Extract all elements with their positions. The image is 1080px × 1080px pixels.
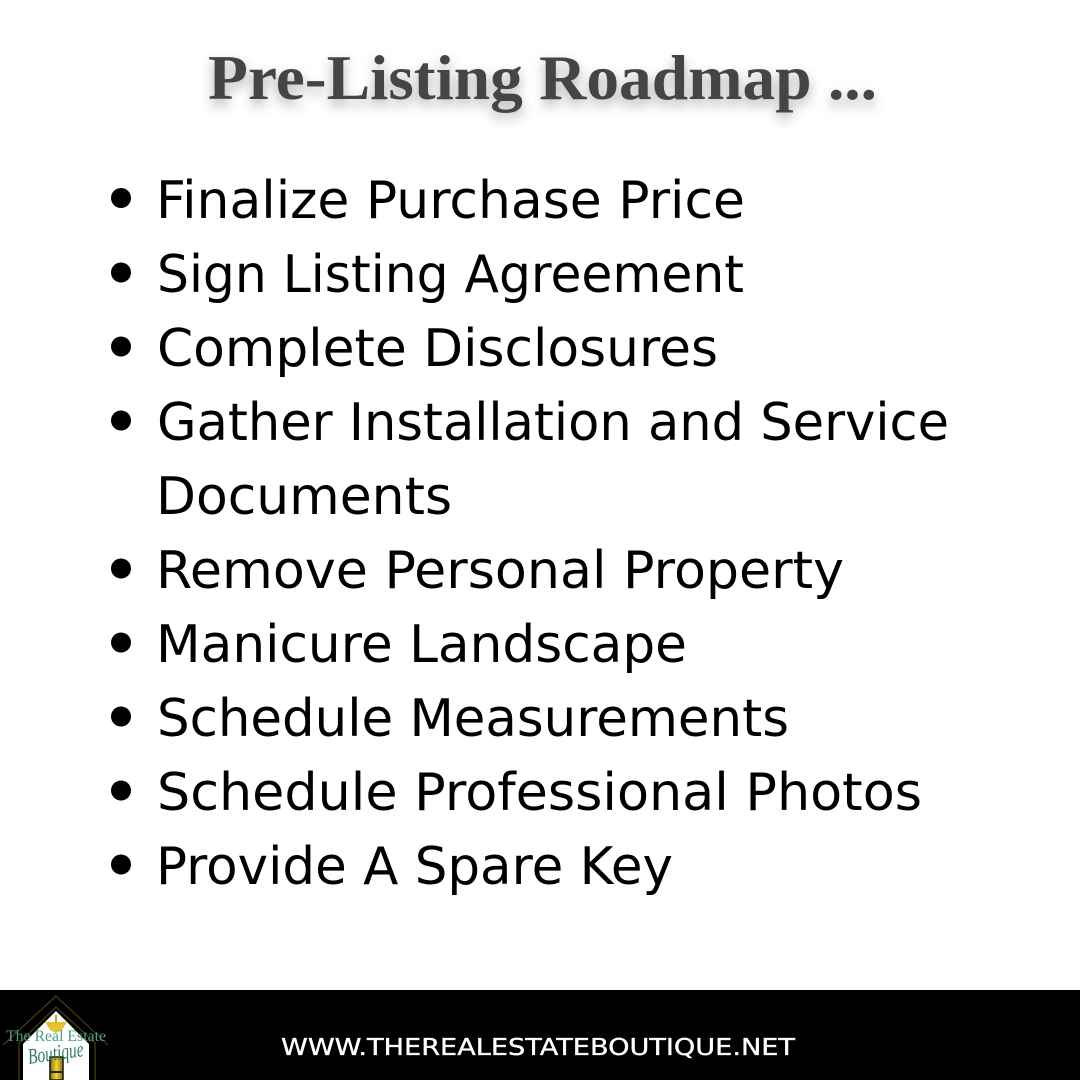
item: gather installation and service documents: Documents bbox=[156, 467, 452, 527]
item: gather installation and service documents bbox=[111, 393, 949, 527]
website url: WWW.THEREALESTATEBOUTIQUE.NET bbox=[281, 1035, 796, 1061]
checklist bbox=[111, 171, 949, 897]
logo: the real estate boutique house: The Real Estate bbox=[6, 1028, 106, 1045]
item: schedule measurements: Schedule Measurements bbox=[157, 689, 789, 749]
item: remove personal property: Remove Personal Property bbox=[156, 541, 844, 601]
item: finalize purchase price: Finalize Purchase Price bbox=[156, 171, 745, 231]
item: provide a spare key: Provide A Spare Key bbox=[156, 837, 673, 897]
item: manicure landscape: Manicure Landscape bbox=[156, 615, 687, 675]
item: complete disclosures: Complete Disclosures bbox=[157, 319, 718, 379]
footer bar bbox=[0, 990, 1080, 1080]
title: Pre-Listing Roadmap ... bbox=[208, 42, 877, 113]
logo: the real estate boutique house bbox=[3, 996, 108, 1080]
item: sign listing agreement: Sign Listing Agreement bbox=[157, 245, 744, 305]
logo: the real estate boutique house: Boutique bbox=[26, 1036, 85, 1069]
item: schedule professional photos: Schedule Professional Photos bbox=[157, 763, 922, 823]
item: gather installation and service documents: Gather Installation and Service bbox=[157, 393, 949, 453]
